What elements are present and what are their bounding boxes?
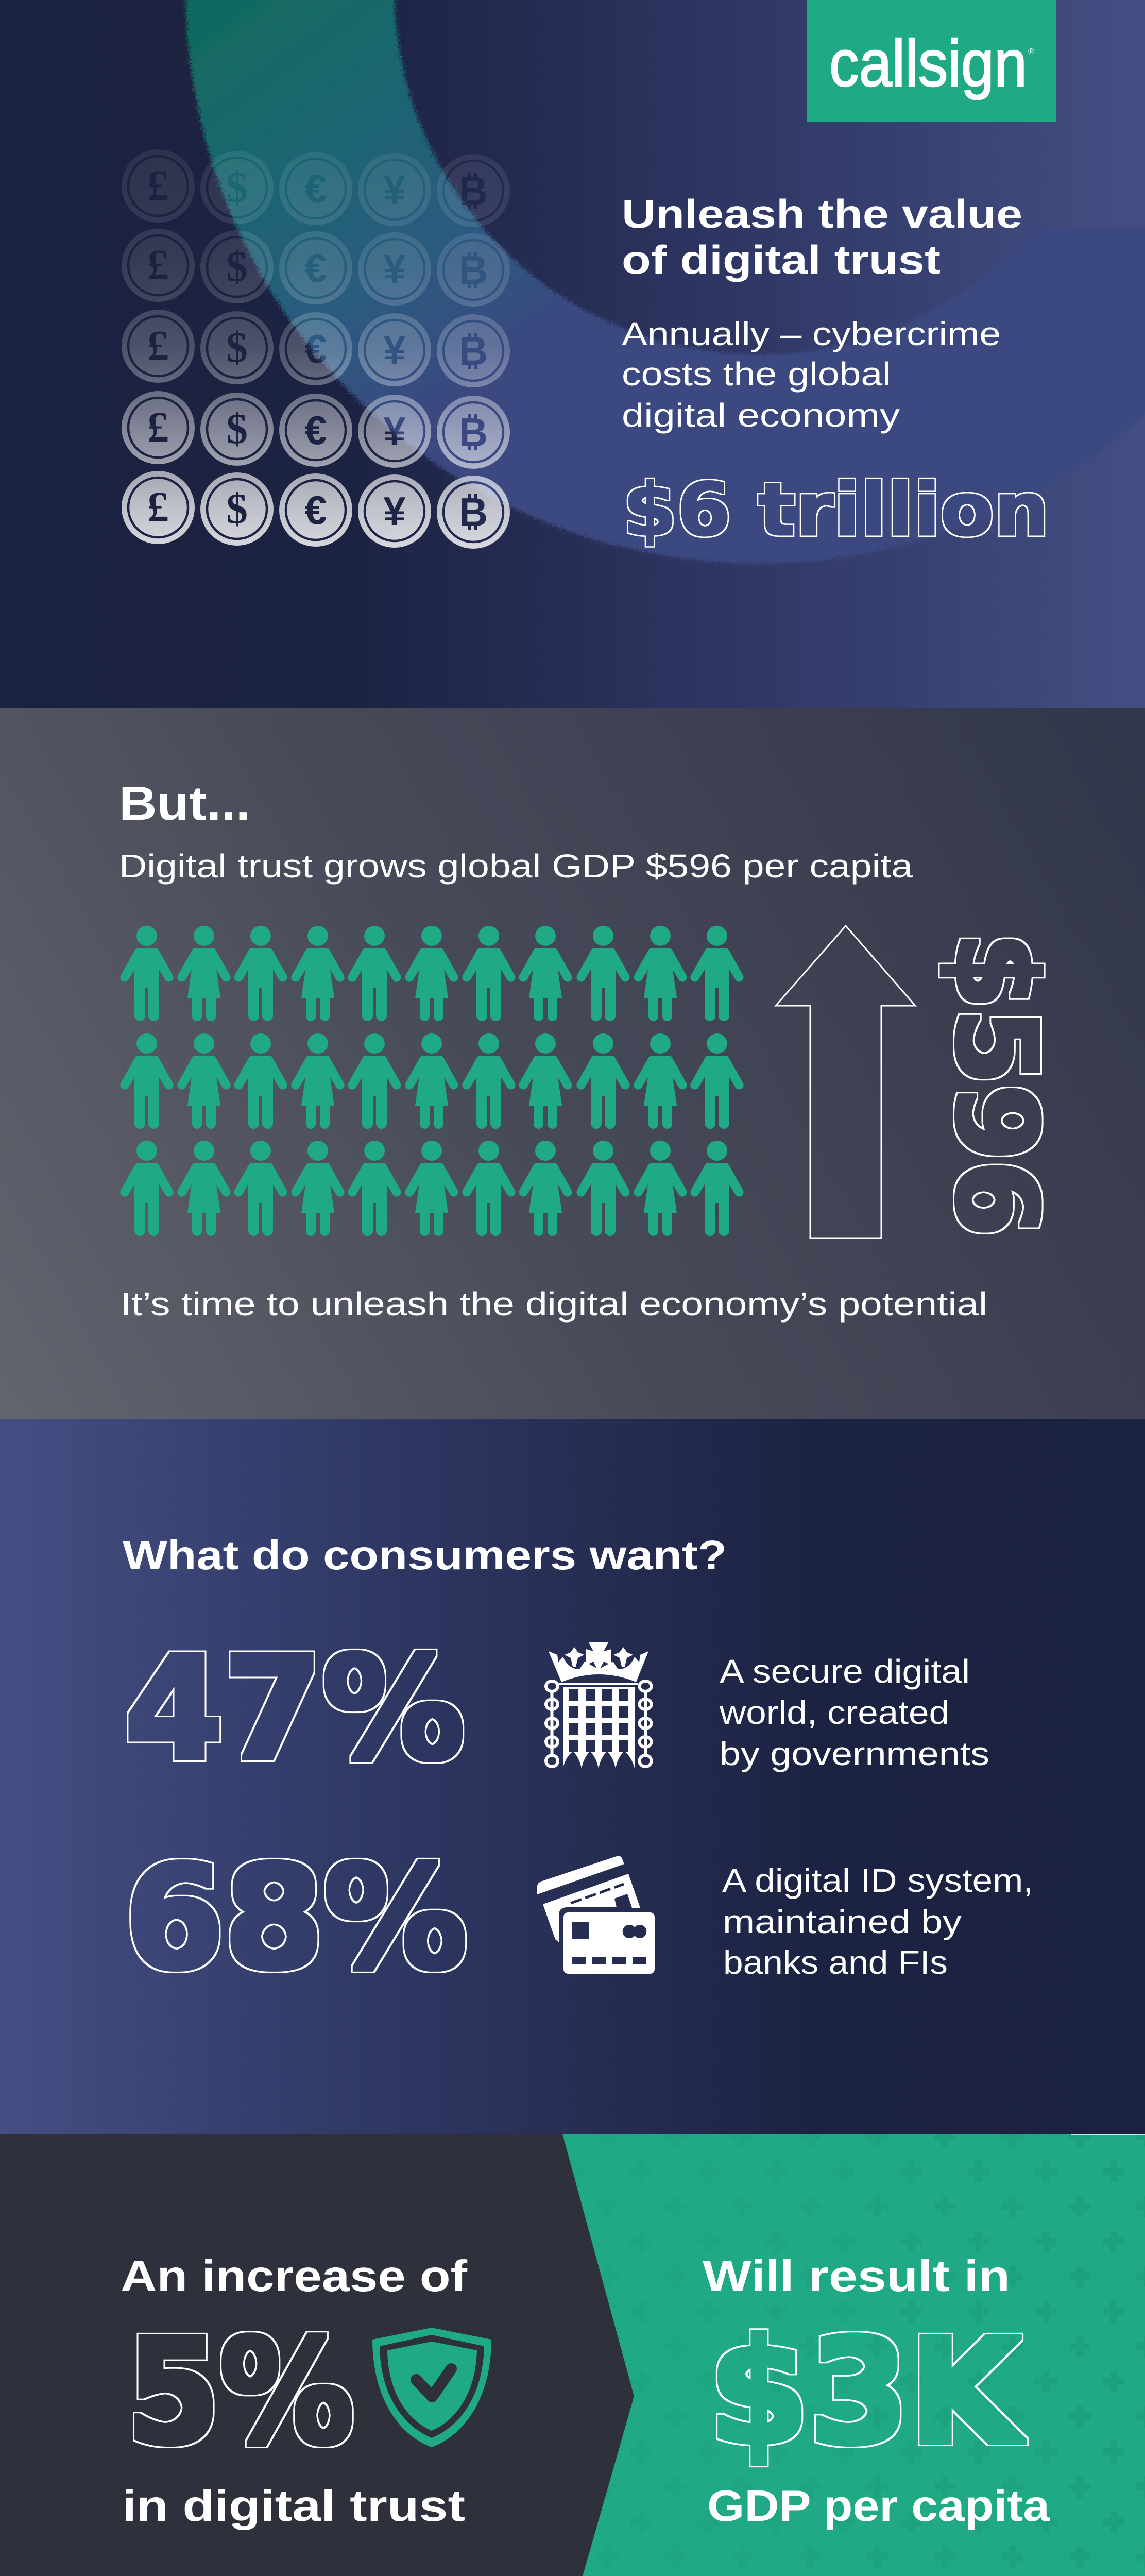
- logo: callsign on green tab: ®: [1028, 47, 1034, 56]
- heading: [622, 191, 1022, 282]
- text: GDP per capita: GDP per capita: [707, 2482, 1050, 2531]
- body text: annual cybercrime cost: Annually – cybercrime: [622, 315, 1001, 352]
- panel: trust increase result: [0, 2134, 1145, 2576]
- panel: digital trust GDP growth: [0, 708, 1145, 1419]
- icon: bank cards: [537, 1856, 655, 1974]
- logo: callsign on green tab: [807, 0, 1056, 122]
- green arrow panel with cross pattern: [562, 2134, 1145, 2576]
- text: banks: banks and FIs: [723, 1944, 948, 1981]
- text: banks: maintained by: [723, 1903, 962, 1940]
- body text: annual cybercrime cost: costs the global: [622, 355, 891, 393]
- text: governments: by governments: [720, 1735, 989, 1772]
- icon grid: currency coins fading upward: [122, 149, 510, 549]
- body text: annual cybercrime cost: [622, 315, 1001, 434]
- panel: hero: [0, 0, 1145, 708]
- panel: what consumers want: [0, 1419, 1145, 2134]
- subheading: Digital trust grows global GDP $596 per capita: [119, 848, 913, 885]
- text: governments: A secure digital: [720, 1653, 970, 1690]
- icon: portcullis: [546, 1642, 651, 1768]
- people pictogram: three rows of eleven figures: [120, 926, 744, 1236]
- text: banks: [722, 1862, 1033, 1981]
- text: governments: world, created: [719, 1694, 949, 1731]
- arrow: outlined upward: [776, 926, 915, 1238]
- closing text: It’s time to unleash the digital economy’s potential: [121, 1285, 987, 1323]
- statistic: $3K outlined: $3K: [709, 2309, 1026, 2477]
- heading: Unleash the value: [622, 191, 1022, 236]
- heading: of digital trust: [622, 237, 941, 282]
- text: governments: [719, 1653, 989, 1772]
- statistic: 68% outlined: 68%: [125, 1836, 467, 2001]
- heading: What do consumers want?: [123, 1532, 727, 1578]
- text: banks: A digital ID system,: [722, 1862, 1033, 1899]
- heading: But...: But...: [119, 776, 250, 830]
- logo: callsign on green tab: callsign: [829, 27, 1027, 100]
- panel: report download: [0, 2137, 1145, 2576]
- statistic: $6 trillion outlined: $6 trillion: [623, 468, 1049, 552]
- text: Will result in: Will result in: [703, 2252, 1010, 2301]
- text: in digital trust: in digital trust: [122, 2482, 465, 2531]
- statistic: $596 rotated outlined: $596: [932, 933, 1060, 1236]
- decorative ring arc: [288, 2137, 1145, 2576]
- statistic: 47% outlined: 47%: [125, 1626, 465, 1791]
- body text: annual cybercrime cost: digital economy: [622, 397, 900, 434]
- icon: shield with check: [372, 2328, 491, 2447]
- statistic: 5% outlined: 5%: [127, 2309, 354, 2477]
- text: An increase of: An increase of: [121, 2252, 468, 2301]
- decorative ring arc: [290, 0, 1145, 459]
